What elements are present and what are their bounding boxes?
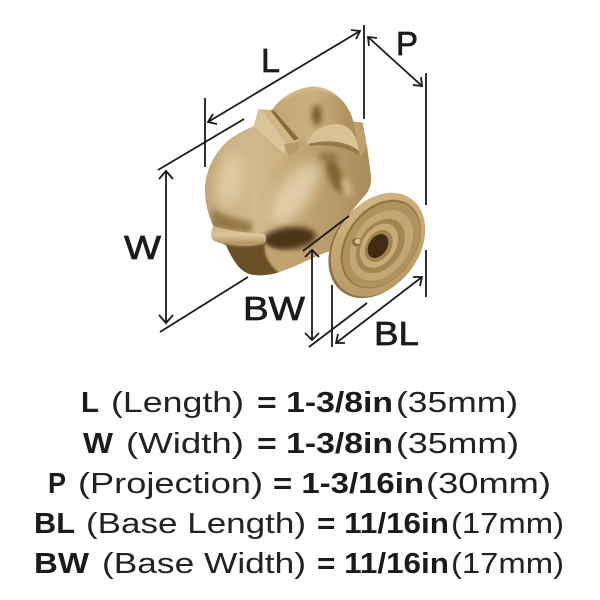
cone shadow bbox=[262, 224, 317, 252]
spec: projection: (30mm) bbox=[426, 468, 551, 500]
spec: base length bbox=[34, 508, 564, 540]
spec: width: (35mm) bbox=[396, 428, 519, 460]
spec: base width: (17mm) bbox=[451, 548, 564, 580]
spec: base length: (17mm) bbox=[451, 508, 564, 540]
label P: P bbox=[396, 25, 418, 62]
spec: length bbox=[81, 387, 518, 419]
spec: base width: BW bbox=[34, 548, 90, 580]
spec: width bbox=[83, 428, 519, 460]
spec: width: W bbox=[83, 428, 114, 460]
spec: projection: P bbox=[48, 468, 66, 500]
spec: base width bbox=[34, 548, 564, 580]
spec: base length: (Base Length) bbox=[86, 508, 306, 540]
dimension lines and arrows bbox=[158, 25, 426, 347]
W dimension bbox=[158, 119, 248, 332]
specification list bbox=[34, 387, 564, 580]
P dimension bbox=[368, 37, 426, 205]
label BW: BW bbox=[243, 290, 306, 327]
spec: base width: = 11/16in bbox=[317, 548, 449, 580]
right lobe fin bbox=[307, 124, 360, 152]
spec: base length: = 11/16in bbox=[317, 508, 449, 540]
label BL: BL bbox=[374, 315, 419, 352]
spec: projection: = 1-3/16in bbox=[273, 468, 424, 500]
spec: length: = 1-3/8in bbox=[257, 387, 393, 419]
spec: length: (35mm) bbox=[396, 387, 518, 419]
spec: length: L bbox=[81, 387, 99, 419]
lower shell bbox=[222, 243, 280, 276]
knob body bbox=[202, 85, 373, 280]
spec: length: (Length) bbox=[111, 387, 244, 419]
top lobe bbox=[272, 87, 357, 147]
lower fin bbox=[211, 226, 266, 244]
spec: projection bbox=[48, 468, 551, 500]
label L: L bbox=[261, 42, 280, 79]
spec: base length: BL bbox=[34, 508, 75, 540]
cone highlight bbox=[268, 158, 324, 227]
BW dimension bbox=[303, 216, 367, 347]
spec: projection: (Projection) bbox=[78, 468, 263, 500]
BL dimension bbox=[332, 250, 426, 347]
L dimension bbox=[205, 25, 364, 167]
spec: base width: (Base Width) bbox=[102, 548, 306, 580]
spec: width: = 1-3/8in bbox=[257, 428, 393, 460]
right folds bbox=[323, 159, 345, 194]
base flange bbox=[309, 175, 445, 316]
product image: brass knob bbox=[202, 85, 445, 316]
upper fin bbox=[254, 109, 300, 157]
label W: W bbox=[124, 229, 162, 266]
seam between left shell and cone bbox=[205, 138, 230, 225]
spec: width: (Width) bbox=[126, 428, 244, 460]
